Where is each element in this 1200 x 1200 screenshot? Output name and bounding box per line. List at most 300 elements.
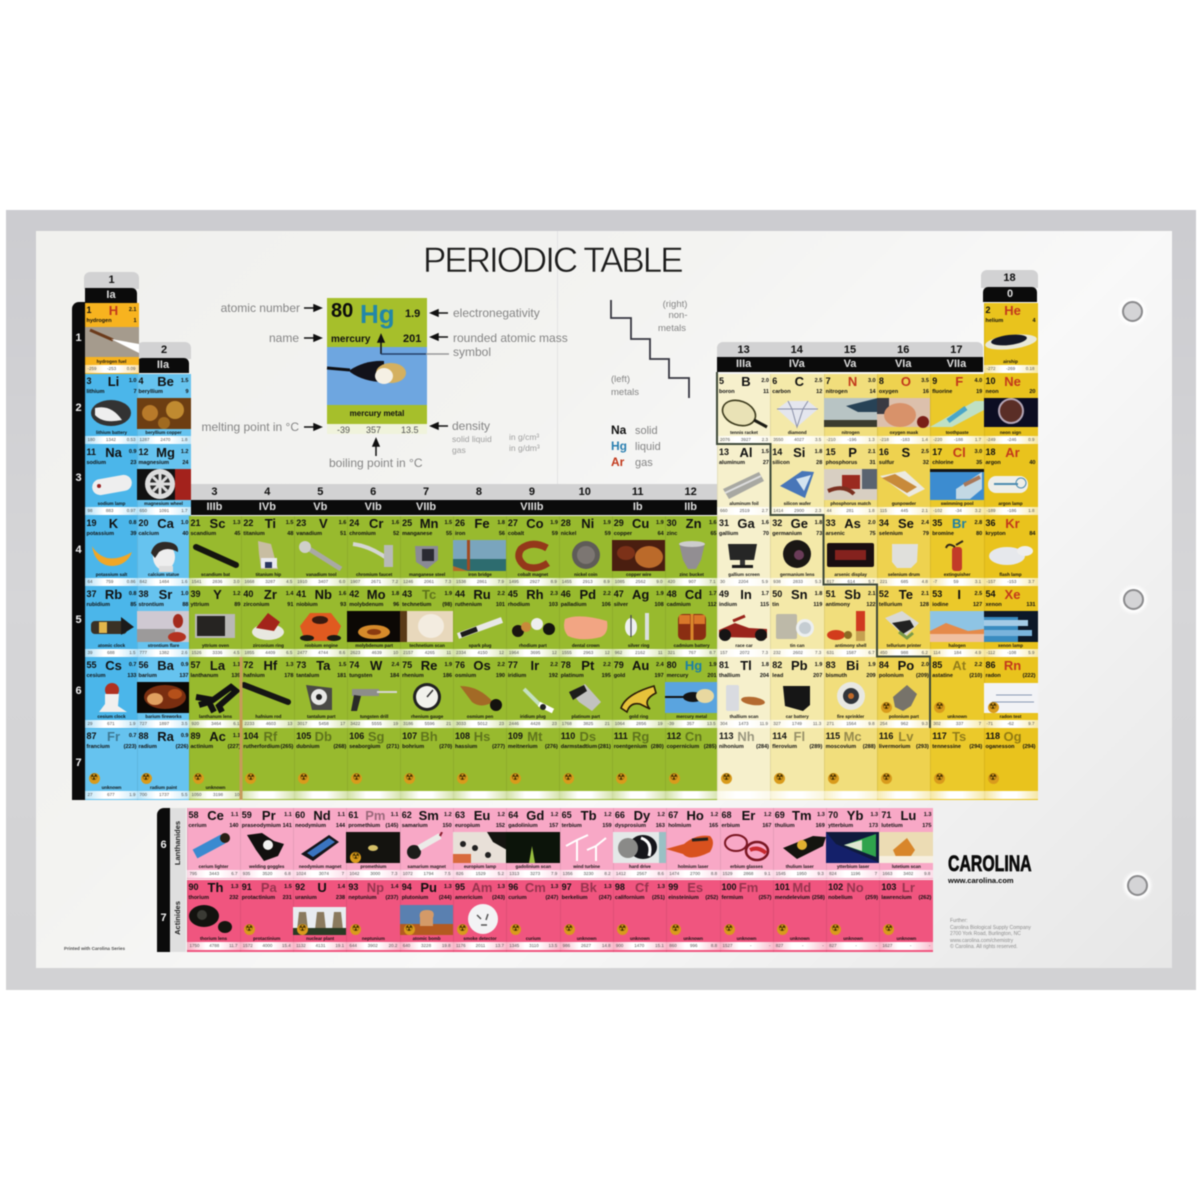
element: selenium: selenium (879, 530, 903, 536)
element: uranium: 92 (295, 882, 305, 892)
element: hafnium: hafnium (243, 672, 265, 678)
element: chromium: Cr (369, 516, 383, 530)
element: lutetium (879, 808, 933, 879)
element: beryllium: 4 (138, 376, 144, 386)
element: cesium: cesium clock (97, 714, 126, 718)
element: osmium: Os (473, 658, 491, 672)
element: zirconium: zirconium (243, 602, 269, 608)
group number tab 18 (981, 270, 1038, 288)
element: praseodymium: 1.1 (284, 812, 292, 818)
element: flerovium: Fl (794, 728, 805, 744)
element: oganesson: ☢ (989, 772, 997, 782)
element: actinium: 1.1 (233, 732, 240, 738)
element: thorium (186, 880, 240, 952)
element: ytterbium: 173 (869, 823, 878, 829)
element: aluminum: aluminum (719, 460, 745, 466)
element: krypton: Kr (1005, 516, 1020, 530)
element: neptunium: neptunium (362, 936, 385, 940)
element: manganese: Mn (420, 516, 438, 530)
element: cerium: 140 (229, 823, 238, 829)
element: plutonium: 94 (402, 882, 412, 892)
element: roentgenium (612, 728, 666, 800)
element: mercury (665, 658, 719, 728)
element: polonium: 84 (879, 660, 889, 670)
element: sodium: sodium lamp (98, 500, 125, 506)
element: technetium: (98) (442, 602, 452, 608)
element: yttrium: 1.2 (233, 590, 240, 596)
element: plutonium: plutonium (402, 894, 428, 900)
element: silver: 1.9 (656, 590, 664, 596)
element: cobalt: 59 (552, 530, 558, 536)
element: cobalt: 1495 2927 8.9 (509, 578, 557, 584)
element: tellurium: 52 (879, 588, 889, 598)
group numbers 3 to 12: 4 (264, 486, 270, 498)
element: ytterbium: 70 (828, 810, 838, 820)
element: promethium: 1042 3000 7.3 (349, 871, 397, 876)
element: americium: Am (472, 880, 492, 894)
element: rhenium (400, 658, 454, 728)
text: physical values: 13.5 (401, 425, 419, 435)
element: einsteinium: (252) (705, 894, 718, 900)
element: potassium: potassium salt (96, 572, 127, 576)
element: curium: curium (508, 894, 527, 900)
group labels IIIa to VIIa: IVa (789, 358, 805, 370)
text: non-metals label: metals (658, 323, 686, 334)
element: dubnium: (268) (333, 744, 346, 750)
element: barium: barium (138, 672, 157, 678)
element: barium: 137 (179, 672, 188, 678)
element: einsteinium: Es (687, 880, 703, 894)
element: fluorine: 4.0 (975, 378, 982, 384)
element: molybdenum: 1.8 (392, 590, 399, 596)
metal and non-metal staircase line on table (717, 372, 930, 728)
group numbers 3 to 12: 12 (684, 486, 697, 498)
group labels IIIb to IIb: IIb (684, 501, 697, 513)
element: bismuth: 209 (866, 672, 876, 678)
element: californium: 1.3 (657, 884, 665, 890)
element: iridium: Ir (531, 658, 539, 672)
element: yttrium: yttrium (190, 602, 209, 608)
element: germanium: 73 (816, 530, 822, 536)
element: strontium: 38 (138, 588, 149, 598)
element: bismuth: 1.9 (868, 662, 876, 668)
element: osmium: 190 (496, 672, 505, 678)
element: gold: 79 (614, 660, 624, 670)
element: magnesium: 650 1091 1.7 (140, 508, 188, 512)
element: flerovium: flerovium (772, 744, 797, 750)
element: iodine: 53 (932, 588, 942, 598)
element: bromine: bromine (932, 530, 954, 536)
element: terbium: 1.2 (604, 812, 612, 818)
element: lead (770, 658, 824, 728)
element: polonium: 254 962 9.3 (880, 720, 928, 726)
element: vanadium: vanadium (296, 530, 322, 536)
element: hafnium: Hf (264, 658, 277, 672)
element: sodium: 11 (86, 446, 96, 456)
element: palladium: Pd (579, 586, 596, 602)
element: helium: 2 (986, 304, 991, 314)
element: selenium: Se (898, 516, 914, 530)
element: ruthenium: 2334 4150 12 (456, 650, 504, 654)
element: helium: -272 -269 0.18 (986, 366, 1034, 370)
element: lanthanum: lanthanum (190, 672, 218, 678)
element: thallium: thallium (719, 672, 740, 678)
group labels IIIb to IIb: IVb (259, 501, 276, 513)
element: chlorine: swimming pool (941, 500, 974, 506)
element: ytterbium (826, 808, 880, 879)
group numbers 13 to 17: 14 (791, 344, 803, 356)
legend: field labels: electronegativity (453, 306, 540, 320)
element: promethium: promethium (348, 823, 380, 829)
element: beryllium (136, 374, 190, 444)
element: tennessine (930, 728, 984, 800)
element: manganese: manganese steel (409, 572, 445, 576)
element: calcium: calcium (138, 530, 159, 536)
element: rhodium: 1964 3695 12 (509, 650, 557, 654)
element: antimony: antimony (826, 602, 850, 608)
element: carbon: C (795, 374, 804, 388)
element: helium: 4 (1032, 318, 1036, 324)
element: manganese: 55 (446, 530, 452, 536)
element: protactinium: protactinium (242, 894, 275, 900)
element: magnesium: magnesium (138, 460, 169, 466)
element: praseodymium: 935 3520 6.8 (243, 871, 291, 876)
element: plutonium: 1.3 (444, 884, 452, 890)
element: tellurium: 128 (920, 602, 929, 608)
element: boron: tennis racket (730, 430, 758, 434)
element: thallium: 304 1473 11.9 (720, 720, 768, 726)
element: mercury: mercury metal (676, 714, 707, 718)
group numbers 3 to 12: 7 (423, 486, 429, 498)
element: rubidium: rubidium (86, 602, 110, 608)
element: protactinium: protactinium (253, 936, 280, 940)
element: cadmium (665, 586, 719, 658)
element: sodium: Na (105, 444, 122, 460)
element: neon: Ne (1004, 374, 1021, 388)
element: strontium: strontium flare (148, 642, 179, 648)
element: cesium: 55 (86, 660, 97, 670)
element: radon: -71 -62 9.7 (986, 720, 1034, 726)
element: americium: 95 (455, 882, 465, 892)
element: beryllium: 1287 2470 1.8 (140, 436, 188, 442)
element: rhenium: 1.9 (444, 662, 452, 668)
element: boron: 2076 3927 2.3 (720, 436, 768, 442)
element: lithium (84, 374, 138, 444)
element: neptunium: neptunium (348, 894, 376, 900)
element: hassium: hassium (455, 744, 477, 750)
element: manganese: 1246 2061 7.3 (403, 578, 451, 584)
element: europium: europium (455, 823, 480, 829)
element: mendelevium: ☢ (778, 924, 786, 934)
element: lawrencium: (262) (919, 894, 931, 900)
element: nobelium: 102 (828, 882, 843, 892)
element: francium (84, 728, 138, 800)
element: curium (506, 880, 560, 952)
element: promethium (346, 808, 400, 879)
element: bohrium: ☢ (406, 772, 414, 782)
element: polonium: (209) (916, 672, 929, 678)
element: mendelevium: mendelevium (775, 894, 810, 900)
element: neptunium: 644 3902 20.2 (349, 942, 397, 948)
element: protactinium: 91 (242, 882, 252, 892)
element: curium: Cm (525, 880, 546, 894)
element: holmium: holmium (668, 823, 691, 829)
element: praseodymium: Pr (262, 808, 276, 823)
element: rhenium: rhenium (402, 672, 424, 678)
element: plutonium: atomic bomb (413, 936, 441, 940)
element: iodine: iodine (932, 602, 948, 608)
text: physical values (337, 425, 419, 435)
element: iron: 56 (499, 530, 505, 536)
element: neon: neon (986, 388, 999, 394)
group numbers 3 to 12: 5 (317, 486, 323, 498)
state of matter legend: solid (635, 425, 658, 437)
element: thallium: 1.8 (761, 662, 769, 668)
element: iron (453, 516, 507, 586)
element: neodymium: Nd (313, 808, 331, 823)
element: mendelevium (773, 880, 827, 952)
element: gallium: 30 2204 5.9 (720, 578, 768, 584)
element: silicon (770, 444, 824, 516)
element: astatine: ☢ (936, 702, 944, 712)
group numbers 3 to 12: 9 (529, 486, 535, 498)
element: oganesson: Og (1003, 728, 1022, 744)
element: uranium: 1.4 (337, 884, 345, 890)
element: aluminum: aluminum foil (729, 500, 759, 506)
element: scandium: scandium (190, 530, 216, 536)
element: tellurium: tellurium printer (887, 642, 921, 648)
element: lead: car battery (786, 714, 809, 718)
element: palladium: 106 (602, 602, 611, 608)
element: thorium: 1.3 (231, 884, 238, 890)
element: lawrencium: unknown (897, 936, 916, 940)
element: bohrium: Bh (420, 728, 438, 744)
element: dysprosium: 66 (615, 810, 625, 820)
state of matter legend: Na (611, 423, 627, 437)
element: hafnium: 178 (284, 672, 293, 678)
element: iridium: iridium (508, 672, 526, 678)
element: cadmium: Cd (685, 586, 702, 602)
element: iodine: I (957, 586, 961, 602)
element: osmium (453, 658, 507, 728)
element: actinium: unknown (206, 784, 225, 790)
element: nickel: 1455 2913 8.9 (562, 578, 610, 584)
element: hafnium: hafnium rod (255, 714, 281, 718)
element: platinum: platinum part (572, 714, 600, 718)
element: gallium: 1.6 (761, 520, 769, 526)
element: phosphorus: phosphorus match (830, 500, 871, 506)
element: mendelevium: unknown (790, 936, 810, 940)
element: hassium: (277) (492, 744, 505, 750)
element: plutonium (400, 880, 454, 952)
element: germanium: 32 (772, 518, 782, 528)
fine print block: Further: (950, 918, 968, 924)
element: iridium: iridium plug (520, 714, 546, 718)
element: einsteinium: 860 996 8.8 (669, 942, 717, 948)
element: hydrogen: -259 -253 0.09 (88, 366, 136, 370)
element: gold: 1064 2856 19 (615, 720, 663, 726)
element: oxygen: 8 (879, 376, 884, 386)
element: molybdenum: molybdenum (349, 602, 383, 608)
element: californium: 98 (615, 882, 625, 892)
element: cerium: cerium lighter (199, 864, 228, 869)
period number bar: 3 (75, 472, 82, 484)
element: berkelium: 97 (562, 882, 572, 892)
element: chromium: 1907 2671 7.2 (350, 578, 398, 584)
icon: punched hole bottom (1127, 875, 1148, 896)
element: silicon: silicon wafer (784, 500, 811, 506)
element: hydrogen: hydrogen fuel (97, 358, 126, 364)
element: samarium: 1.2 (444, 812, 452, 818)
element: astatine: 2.2 (975, 662, 982, 668)
element: iridium: 192 (549, 672, 558, 678)
element: holmium: 1474 2700 8.8 (669, 871, 717, 876)
element: erbium (720, 808, 774, 879)
element: astatine: astatine (932, 672, 953, 678)
element: phosphorus: 15 (826, 446, 836, 456)
element: arsenic: As (844, 516, 861, 530)
series labels: Actinides (173, 901, 182, 935)
group numbers 13 to 17: 17 (950, 344, 963, 356)
element: astatine: 302 337 7 (933, 720, 981, 726)
element: promethium: promethium (360, 864, 386, 869)
element: gadolinium: 157 (549, 823, 558, 829)
element: silver: silver ring (628, 642, 649, 648)
element: osmium: 2.2 (497, 662, 505, 668)
element: aluminum: Al (740, 444, 752, 460)
element: radium: 88 (138, 730, 149, 740)
element: thorium: thorium (188, 894, 209, 900)
element: argon: Ar (1005, 444, 1020, 460)
text: physical values: -39 (337, 425, 350, 435)
element: bohrium: bohrium (402, 744, 424, 750)
element: rhenium: rhenium gauge (411, 714, 443, 718)
element: hydrogen (84, 302, 138, 374)
element: ruthenium: ruthenium (455, 602, 482, 608)
element: sulfur: 115 445 2.1 (880, 508, 928, 512)
element: rubidium: 37 (86, 588, 97, 598)
text: metals label: metals (611, 387, 639, 398)
element: iodine (930, 586, 984, 658)
element: cadmium: cadmium battery (674, 642, 710, 648)
element: sulfur: 32 (923, 460, 929, 466)
element: technetium: 2157 4265 11 (403, 650, 451, 654)
element: nitrogen: 3.0 (868, 378, 876, 384)
element: curium: 1345 3110 13.5 (509, 942, 557, 948)
element: platinum: Pt (581, 658, 594, 672)
element: uranium: U (317, 880, 327, 894)
element: germanium: germanium lens (780, 572, 815, 576)
element: arsenic: arsenic (826, 530, 845, 536)
element: bromine: 80 (976, 530, 982, 536)
element: silicon: silicon (772, 460, 790, 466)
element: silver: Ag (632, 586, 649, 602)
period number bar: 6 (75, 685, 82, 697)
element: barium: 0.9 (181, 662, 188, 668)
element: polonium: Po (898, 658, 914, 672)
element: roentgenium: (280) (651, 744, 664, 750)
element: hafnium (241, 658, 295, 728)
element: promethium: 1.1 (391, 812, 398, 818)
element: livermorium: livermorium (879, 744, 910, 750)
legend: field labels (201, 301, 568, 470)
element: carbon: 2.5 (815, 378, 822, 384)
element: protactinium: Pa (261, 880, 277, 894)
state of matter legend (611, 423, 661, 469)
element: sulfur: 16 (879, 446, 889, 456)
element: tin (770, 586, 824, 658)
element: phosphorus (824, 444, 878, 516)
element: livermorium: 116 (879, 730, 893, 740)
element: bromine: -7 59 3.1 (933, 578, 981, 584)
element: radium: radium (138, 744, 157, 750)
legend: field labels: density (452, 419, 490, 433)
element: manganese: 1.5 (444, 520, 452, 526)
element: tungsten: tungsten (349, 672, 372, 678)
element: tin: 119 (813, 602, 822, 608)
element: scandium: Sc (210, 516, 225, 530)
element: lithium: 3 (86, 376, 92, 386)
element: erbium: 167 (762, 823, 772, 829)
element: praseodymium (240, 808, 294, 879)
element: samarium: 1072 1794 7.5 (403, 871, 451, 876)
element: francium: (223) (124, 744, 136, 750)
element: helium: He (1004, 302, 1021, 318)
legend: sample mercury cell (327, 298, 427, 435)
element: thulium: 1545 1950 9.3 (776, 871, 824, 876)
element: gadolinium: gadolinium (508, 823, 538, 829)
element: titanium: 22 (243, 518, 253, 528)
element: radon: radon (986, 672, 1001, 678)
element: oganesson (984, 728, 1038, 800)
element: strontium: 777 1382 2.6 (140, 650, 188, 654)
element: uranium: 238 (336, 894, 345, 900)
element: tungsten: 184 (390, 672, 399, 678)
element: berkelium: unknown (577, 936, 596, 940)
element: ruthenium: spark plug (469, 642, 491, 648)
element: darmstadtium (559, 728, 613, 800)
element: chromium: 52 (393, 530, 399, 536)
element: mendelevium: 827 - - (776, 942, 824, 948)
element: iridium: 2446 4428 23 (509, 720, 557, 726)
element: einsteinium: einsteinium (668, 894, 699, 900)
element: lawrencium (879, 880, 933, 952)
element: chlorine: Cl (953, 444, 966, 460)
element: astatine: (210) (969, 672, 982, 678)
element: xenon: xenon lamp (998, 642, 1023, 648)
element: carbon: 3550 4027 3.5 (773, 436, 821, 442)
text: metals label (611, 374, 639, 398)
element: neptunium (346, 880, 400, 952)
element: nitrogen: N (848, 374, 857, 388)
period number bar (72, 302, 85, 800)
legend: field labels: solid liquid (452, 434, 492, 444)
element: indium: 115 (760, 602, 769, 608)
element: ruthenium: 44 (455, 588, 465, 598)
element: carbon: 12 (816, 388, 822, 394)
element: protactinium: ☢ (245, 924, 253, 934)
element: iodine: 114 184 4.9 (933, 650, 981, 654)
element: nihonium: nihonium (719, 744, 744, 750)
element: iron: iron bridge (468, 572, 492, 576)
element: tantalum (294, 658, 348, 728)
element: neon: neon sign (1000, 430, 1021, 434)
fine print block: 2700 York Road, Burlington, NC (950, 931, 1021, 937)
element: krypton: krypton (986, 530, 1006, 536)
element: lead: lead (772, 672, 783, 678)
element: radon (984, 658, 1038, 728)
element: germanium (770, 516, 824, 586)
